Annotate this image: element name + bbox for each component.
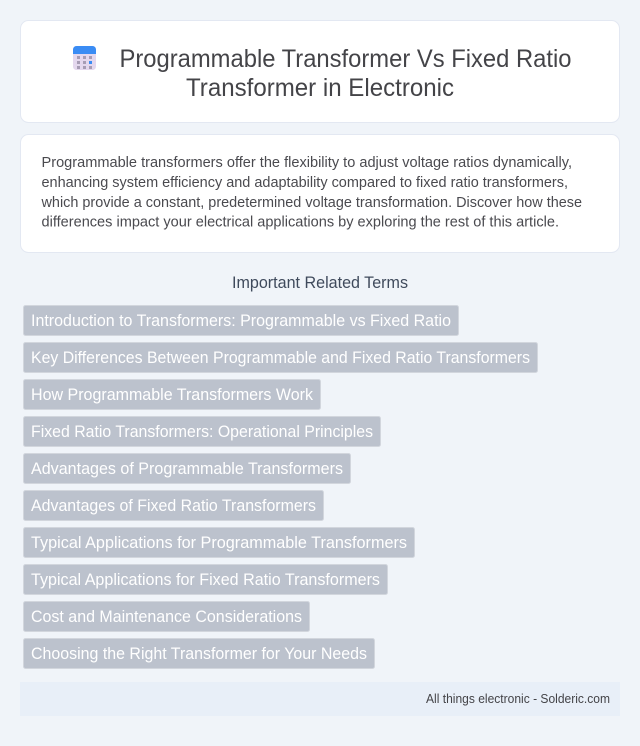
text block: intro	[41, 155, 582, 230]
heading: related terms: Important Related Terms	[232, 273, 408, 292]
tag: applications fixed	[24, 564, 388, 594]
tag: key differences	[24, 342, 538, 372]
tag: fixed ratio principles	[24, 416, 380, 446]
tag: how programmable works: How Programmable Transformers Work	[31, 385, 314, 404]
tag: advantages fixed	[24, 490, 324, 520]
tag: cost and maintenance: Cost and Maintenance Considerations	[31, 607, 302, 626]
text block: intro: enhancing system efficiency and adaptability compared to fixed ratio transformers,	[42, 175, 568, 191]
text block: intro: differences impact your electrical applications by exploring the rest of this article.	[42, 214, 559, 230]
tag: advantages programmable	[24, 454, 350, 484]
tag: advantages programmable: Advantages of Programmable Transformers	[31, 459, 343, 478]
tag: how programmable works	[24, 380, 320, 410]
text block: intro: which provide a constant, predetermined voltage transformation. Discover how these	[41, 195, 582, 211]
tag: introduction: Introduction to Transformers: Programmable vs Fixed Ratio	[31, 311, 451, 330]
tag: choosing	[24, 638, 374, 668]
tag: cost and maintenance	[24, 602, 310, 632]
tag: key differences: Key Differences Between Programmable and Fixed Ratio Transformers	[31, 348, 530, 367]
tag: applications programmable: Typical Applications for Programmable Transformers	[31, 533, 407, 552]
footer	[20, 682, 620, 716]
footer: All things electronic - Solderic.com	[426, 692, 610, 706]
text block: intro: Programmable transformers offer the flexibility to adjust voltage ratios dynamically,	[42, 155, 572, 171]
panel: title card	[20, 20, 620, 122]
tag: advantages fixed: Advantages of Fixed Ratio Transformers	[31, 496, 316, 515]
icon: calendar grid	[73, 46, 96, 70]
tag: applications programmable	[24, 528, 414, 558]
title	[120, 45, 572, 102]
title: Transformer in Electronic	[186, 74, 454, 102]
tag: introduction	[24, 306, 458, 336]
tag: applications fixed: Typical Applications for Fixed Ratio Transformers	[31, 570, 380, 589]
tag: choosing: Choosing the Right Transformer for Your Needs	[31, 644, 367, 663]
panel: intro paragraph	[20, 134, 620, 252]
tag: fixed ratio principles: Fixed Ratio Transformers: Operational Principles	[31, 422, 373, 441]
title: Programmable Transformer Vs Fixed Ratio	[120, 45, 572, 73]
list: related term tags	[24, 306, 538, 668]
